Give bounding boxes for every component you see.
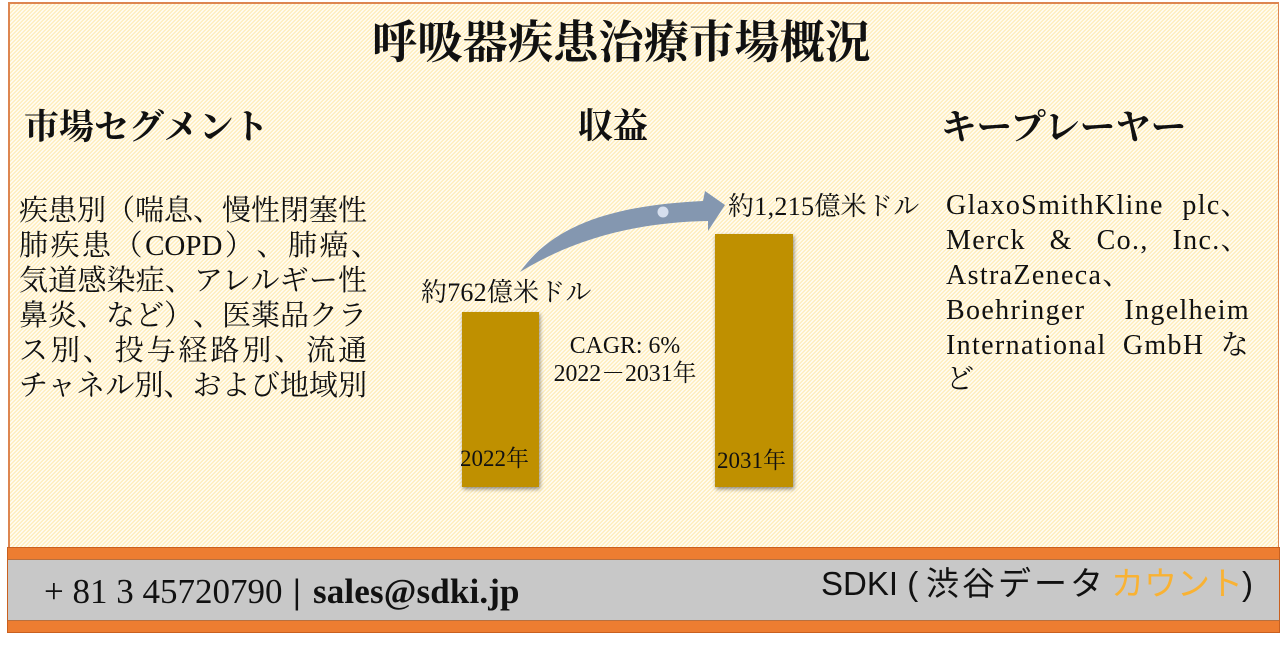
footer: contact details: |	[293, 572, 301, 611]
text block: key players: Merck	[946, 225, 1026, 256]
footer: contact details: + 81 3 45720790	[44, 572, 282, 611]
bar: 2031	[715, 234, 793, 487]
heading: revenue: 収益	[578, 107, 648, 146]
footer: contact details: sales@sdki.jp	[313, 572, 520, 611]
text block: market segments: 気道感染症、アレルギー性	[19, 265, 367, 297]
label: 2022 value: 約762億米ドル	[421, 278, 592, 307]
text block: key players: GlaxoSmithKline	[946, 190, 1164, 221]
label: CAGR: 2022－2031年	[554, 361, 696, 387]
text block: key players: International	[946, 330, 1107, 361]
heading: market segments: 市場セグメント	[24, 108, 269, 147]
text block: key players: Inc.、	[1172, 225, 1250, 256]
footer: company name: SDKI (	[821, 565, 918, 602]
label: CAGR: CAGR: 6%	[570, 333, 680, 359]
text block: market segments: チャネル別、および地域別	[19, 370, 367, 402]
label: 2031 value: 約1,215億米ドル	[728, 192, 920, 221]
title: 呼吸器疾患治療市場概況	[372, 18, 870, 68]
text block: market segments: 鼻炎、など）、医薬品クラ	[19, 300, 367, 332]
footer: contact details	[44, 572, 520, 611]
text block: key players: Co.,	[1097, 225, 1149, 256]
text block: key players: Ingelheim	[1124, 295, 1250, 326]
text block: market segments: ス別、投与経路別、流通	[19, 335, 367, 367]
text block: key players: plc、	[1182, 190, 1250, 221]
text block: market segments: 肺疾患（COPD）、肺癌、	[19, 230, 380, 262]
text block: market segments	[19, 195, 380, 402]
heading: key players: キープレーヤー	[941, 107, 1186, 147]
text block: key players: &	[1050, 225, 1073, 256]
footer: company name: 渋谷データ	[926, 565, 1106, 602]
arrow: growth	[520, 191, 725, 272]
text block: key players: な	[1221, 330, 1250, 361]
label: 2031 bar year: 2031年	[717, 448, 786, 473]
footer: company name: )	[1242, 565, 1253, 602]
footer: company name	[821, 565, 1253, 602]
label: CAGR	[554, 333, 696, 387]
footer: gray strip	[8, 559, 1279, 621]
text block: key players: AstraZeneca、	[946, 260, 1132, 291]
bar: 2022	[462, 312, 539, 487]
footer band	[7, 547, 1280, 633]
text block: key players: GmbH	[1123, 330, 1204, 361]
text block: key players: Boehringer	[946, 295, 1085, 326]
text block: market segments: 疾患別（喘息、慢性閉塞性	[19, 195, 367, 227]
text block: key players	[946, 190, 1250, 395]
footer: company name: カウント	[1111, 565, 1243, 602]
label: 2022 bar year: 2022年	[460, 446, 529, 471]
text block: key players: ど	[946, 364, 974, 395]
